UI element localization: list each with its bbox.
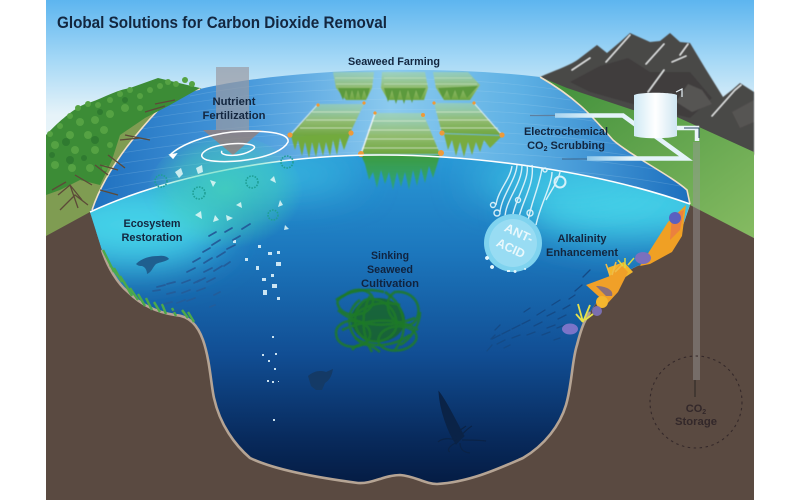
icon: sea turtle, shallow xyxy=(136,256,169,274)
label: alkalinity enhancement: Alkalinity xyxy=(558,233,607,245)
ground: brown earth xyxy=(46,205,754,500)
storage injection line xyxy=(694,380,696,397)
seaweed farm: middle left panel xyxy=(290,104,364,158)
title: Global Solutions for Carbon Dioxide Removal xyxy=(57,14,387,32)
label: sinking seaweed cultivation: Sinking xyxy=(371,250,409,262)
label: seaweed farming: Seaweed Farming xyxy=(348,56,440,68)
farm buoys xyxy=(287,101,505,157)
scrubbing pipes xyxy=(530,116,699,159)
phytoplankton bloom xyxy=(147,135,303,255)
icon: anti-acid tablet: ANT- xyxy=(502,221,535,246)
label: alkalinity enhancement: Enhancement xyxy=(546,247,618,259)
label: electrochemical CO2 scrubbing: CO xyxy=(527,140,605,153)
icon: anti-acid tablet xyxy=(484,214,542,272)
mangrove trees xyxy=(46,77,200,210)
tablet foam xyxy=(485,256,526,273)
label: ecosystem restoration: Ecosystem xyxy=(124,218,181,230)
label: electrochemical CO2 scrubbing: Electrochemical xyxy=(524,126,608,138)
land: right green shore xyxy=(540,77,754,238)
ocean: underwater body xyxy=(90,156,690,483)
storage pipe xyxy=(693,142,700,380)
label: nutrient fertilization: Nutrient xyxy=(212,96,256,108)
seaweed farm: middle right panel xyxy=(434,103,502,157)
ocean surface xyxy=(90,70,690,212)
label: sinking seaweed cultivation: Seaweed xyxy=(367,264,413,276)
icon: squid xyxy=(438,392,486,453)
bubbles sinking xyxy=(233,240,281,421)
tank xyxy=(634,89,682,138)
sky xyxy=(46,0,754,240)
label: nutrient fertilization: Fertilization xyxy=(202,110,266,122)
label: CO2 storage: CO xyxy=(686,403,706,416)
CO2 storage circle xyxy=(650,356,742,448)
label: CO2 storage: Storage xyxy=(675,416,717,428)
kelp tangle: sinking seaweed xyxy=(336,290,420,352)
ocean front edge line xyxy=(90,155,690,212)
label: electrochemical CO2 scrubbing: Scrubbing xyxy=(547,140,605,152)
seabed sand edge xyxy=(102,250,590,484)
land: left shore xyxy=(46,88,220,236)
icon: sea turtle, deep xyxy=(308,369,333,390)
icon: anti-acid tablet: ACID xyxy=(494,236,527,261)
label: ecosystem restoration: Restoration xyxy=(122,232,183,244)
label: electrochemical CO2 scrubbing: 2 xyxy=(544,146,548,153)
nutrient arrow xyxy=(203,67,262,155)
label: sinking seaweed cultivation: Cultivation xyxy=(361,278,419,290)
coral reef xyxy=(562,205,686,334)
shore sand lines xyxy=(92,77,690,210)
fish school: left xyxy=(153,224,250,312)
fish school: right xyxy=(487,270,590,351)
seagrass xyxy=(103,250,194,322)
seaweed farm: centre panel with kelp xyxy=(361,113,440,190)
label: CO2 storage: 2 xyxy=(702,409,706,416)
nutrient swirl rings xyxy=(170,131,288,162)
seaweed farm: back row xyxy=(333,72,480,104)
antacid dissolve swirls xyxy=(490,165,566,225)
illustration: mountains xyxy=(540,33,754,155)
